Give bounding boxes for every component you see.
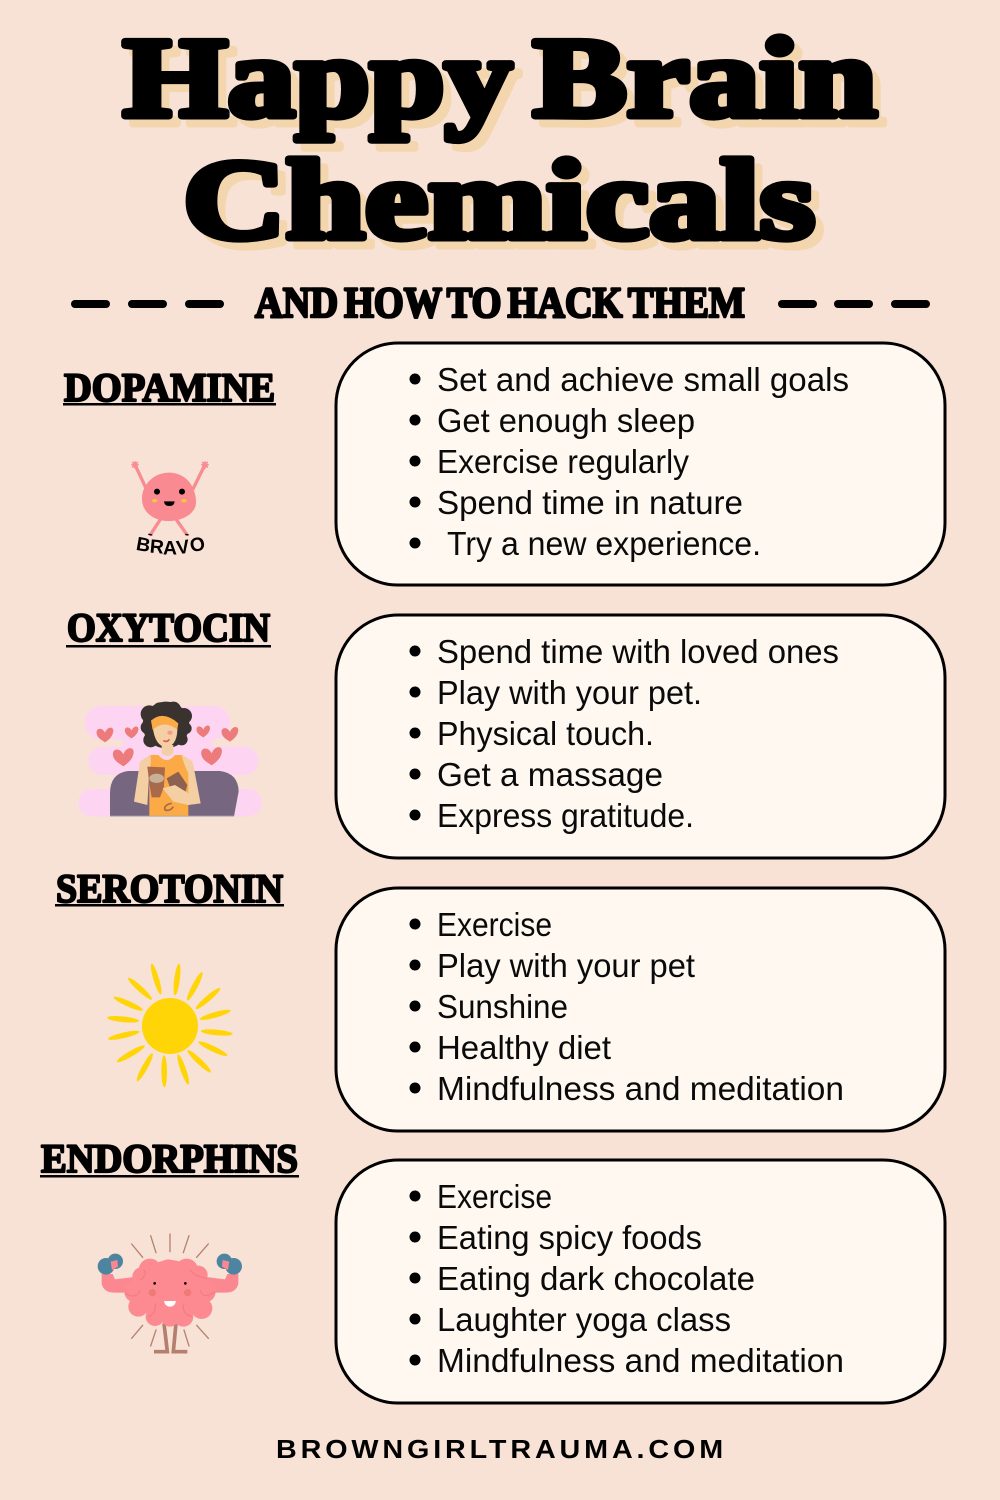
title: Brain: [533, 14, 877, 141]
icon: bravo character: A: [163, 539, 177, 560]
heading: endorphins: ENDORPHINS: [41, 1136, 298, 1181]
panel: oxytocin: Physical touch.: [437, 715, 654, 752]
panel: endorphins: Laughter yoga class: [437, 1301, 731, 1338]
icon: bravo character: V: [175, 537, 191, 559]
icon: woman hugging cat: [78, 702, 262, 817]
icon: sun: [107, 963, 233, 1087]
subtitle: AND HOW TO HACK THEM: [255, 280, 745, 327]
title: Happy: [123, 14, 512, 141]
panel: dopamine: Try a new experience.: [447, 525, 761, 562]
panel: oxytocin: Express gratitude.: [437, 797, 694, 834]
panel: dopamine: Set and achieve small goals: [437, 361, 849, 398]
icon: bravo character: [132, 462, 208, 560]
panel: endorphins: Mindfulness and meditation: [437, 1342, 844, 1379]
panel: serotonin: Healthy diet: [437, 1029, 611, 1066]
icon: bravo character: R: [149, 537, 165, 559]
panel: endorphins: Exercise: [437, 1178, 552, 1215]
panel: serotonin: Sunshine: [437, 988, 568, 1025]
panel: serotonin: Mindfulness and meditation: [437, 1070, 844, 1107]
icon: bravo character: O: [188, 534, 207, 557]
icon: bravo character: B: [135, 534, 152, 557]
panel: dopamine: Spend time in nature: [437, 484, 743, 521]
title: [123, 14, 885, 271]
panel: serotonin: Play with your pet: [437, 947, 695, 984]
panel: oxytocin: [336, 615, 945, 858]
panel: dopamine: Exercise regularly: [437, 443, 689, 480]
panel: endorphins: [336, 1160, 945, 1403]
panel: oxytocin: Spend time with loved ones: [437, 633, 839, 670]
heading: dopamine: DOPAMINE: [64, 365, 275, 410]
panel: endorphins: Eating spicy foods: [437, 1219, 702, 1256]
panel: serotonin: Exercise: [437, 906, 552, 943]
heading: oxytocin: OXYTOCIN: [67, 605, 270, 650]
icon: muscular brain: [98, 1234, 242, 1352]
title: Chemicals: [183, 136, 815, 263]
panel: dopamine: [336, 343, 945, 585]
panel: serotonin: [336, 888, 945, 1131]
panel: endorphins: Eating dark chocolate: [437, 1260, 755, 1297]
title: Chemicals: [191, 144, 823, 271]
title: Happy: [131, 22, 520, 149]
panel: dopamine: Get enough sleep: [437, 402, 695, 439]
panel: oxytocin: Play with your pet.: [437, 674, 702, 711]
footer website: BROWNGIRLTRAUMA.COM: [276, 1434, 727, 1464]
heading: serotonin: SEROTONIN: [56, 866, 283, 911]
panel: oxytocin: Get a massage: [437, 756, 663, 793]
title: Brain: [541, 22, 885, 149]
